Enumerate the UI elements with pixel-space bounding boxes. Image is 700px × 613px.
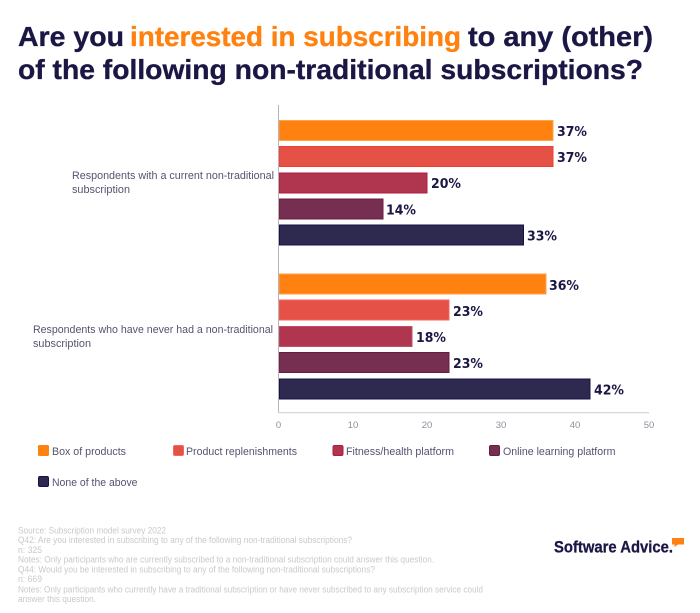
source notes: Notes: Only participants who currently have a traditional subscription or have never subscribed to any subscription service could	[18, 584, 483, 594]
axes: 30	[496, 420, 506, 431]
title: Are you	[18, 21, 124, 52]
axes: 20	[422, 420, 432, 431]
bars: never subscribed: 42%	[594, 382, 624, 398]
bars: never subscribed	[279, 274, 624, 399]
category label: never subscribed: Respondents who have never had a non-traditional	[33, 324, 273, 336]
legend item: fitness/health platform: Fitness/health platform	[346, 446, 454, 458]
legend item: box of products: Box of products	[52, 446, 126, 458]
category label: never subscribed	[33, 324, 273, 350]
title: of the following non-traditional subscriptions?	[18, 54, 643, 85]
bars: current subscribers: 33%	[527, 228, 557, 244]
title: interested in subscribing	[130, 21, 461, 52]
axes: 10	[348, 420, 358, 431]
category label: current subscribers: subscription	[72, 184, 130, 196]
axes	[276, 105, 654, 431]
bars: never subscribed: 23%	[453, 304, 483, 320]
source notes: n: 669	[18, 574, 42, 584]
source notes: Q42: Are you interested in subscribing to any of the following non-traditional subscriptions?	[18, 535, 352, 545]
source notes: answer this question.	[18, 594, 96, 604]
axes: 0	[276, 420, 281, 431]
logo: Software Advice: Software Advice.	[554, 538, 673, 556]
legend item: product replenishments: Product replenishments	[186, 446, 297, 458]
bars: never subscribed: 36%	[549, 278, 579, 294]
icon: orange speech bubble	[672, 538, 684, 547]
source notes	[18, 526, 483, 604]
bars: current subscribers: 37%	[557, 124, 587, 140]
bars: never subscribed: 23%	[453, 356, 483, 372]
category label: current subscribers: Respondents with a current non-traditional	[72, 170, 274, 182]
title	[18, 21, 653, 85]
bars: current subscribers: 14%	[386, 202, 416, 218]
bars: never subscribed: 18%	[416, 330, 446, 346]
axes: 50	[644, 420, 654, 431]
source notes: Q44: Would you be interested in subscribing to any of the following non-traditional subscriptions?	[18, 564, 375, 574]
category label: never subscribed: subscription	[33, 338, 91, 350]
axes: 40	[570, 420, 580, 431]
source notes: Source: Subscription model survey 2022	[18, 526, 166, 536]
category label: current subscribers	[72, 170, 274, 196]
title: to any (other)	[468, 21, 653, 52]
bars: current subscribers: 20%	[431, 176, 461, 192]
bars: current subscribers: 37%	[557, 150, 587, 166]
bar chart	[33, 105, 654, 431]
legend item: online learning platform: Online learning platform	[503, 446, 616, 458]
legend	[38, 445, 616, 489]
source notes: Notes: Only participants who are currently subscribed to a non-traditional subscription could answer this question.	[18, 554, 434, 564]
source notes: n: 325	[18, 545, 42, 555]
bars: current subscribers	[279, 120, 587, 245]
legend item: none of the above: None of the above	[52, 477, 138, 489]
